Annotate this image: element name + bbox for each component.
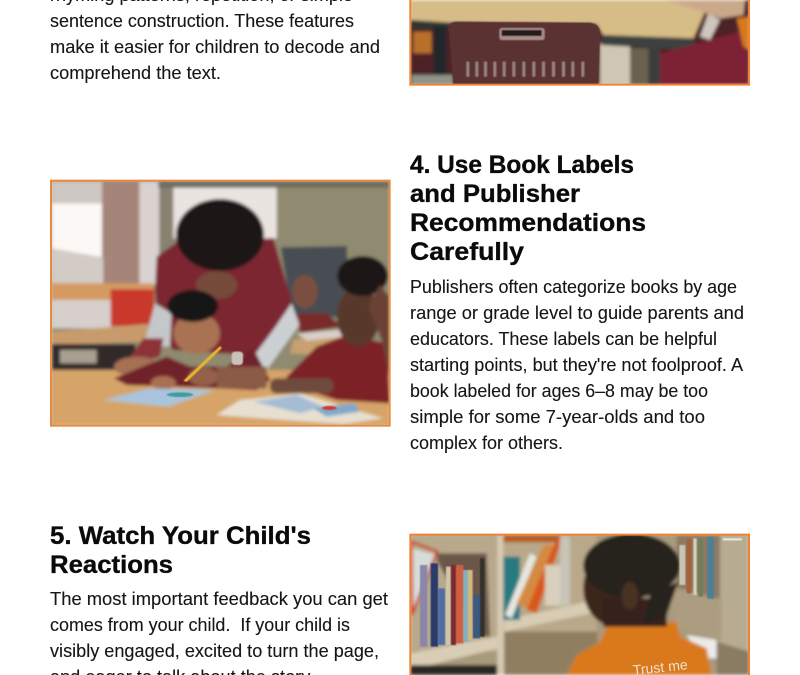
text block: section 5 body: comes from your child. If your child is [50, 615, 350, 635]
text block: section 4 body: range or grade level to guide parents and [410, 303, 744, 323]
text block: section 4 body: starting points, but they're not foolproof. A [410, 355, 743, 375]
text block: section 5 body: The most important feedback you can get [50, 589, 388, 609]
text block: section 3 ending [50, 0, 380, 83]
heading: section 4: and Publisher [410, 180, 580, 208]
text block: section 3 ending: sentence construction. These features [50, 11, 354, 31]
text block: section 4 body: simple for some 7-year-olds and too [410, 407, 705, 427]
text block: section 3 ending: comprehend the text. [50, 63, 221, 83]
photo: child browsing a bookshelf [410, 534, 749, 675]
text block: section 3 ending: make it easier for children to decode and [50, 37, 380, 57]
text block: section 4 body: complex for others. [410, 433, 563, 453]
photo: teacher helping children read at table [51, 180, 390, 426]
heading: section 4: Carefully [410, 238, 524, 266]
text block: section 5 body [50, 589, 388, 675]
heading: section 4: 4. Use Book Labels [410, 151, 634, 179]
heading: section 4: Recommendations [410, 209, 646, 237]
text block: section 4 body: educators. These labels can be helpful [410, 329, 717, 349]
heading: section 5: 5. Watch Your Child's [50, 522, 311, 550]
heading: section 5 [50, 522, 311, 579]
text block: section 4 body [410, 277, 744, 453]
text block: section 4 body: Publishers often categorize books by age [410, 277, 737, 297]
photo: classroom table and chair [410, 0, 749, 85]
text block: section 4 body: book labeled for ages 6–8 may be too [410, 381, 708, 401]
text block: section 5 body: visibly engaged, excited to turn the page, [50, 641, 379, 661]
heading: section 4 [410, 151, 646, 266]
heading: section 5: Reactions [50, 551, 173, 579]
